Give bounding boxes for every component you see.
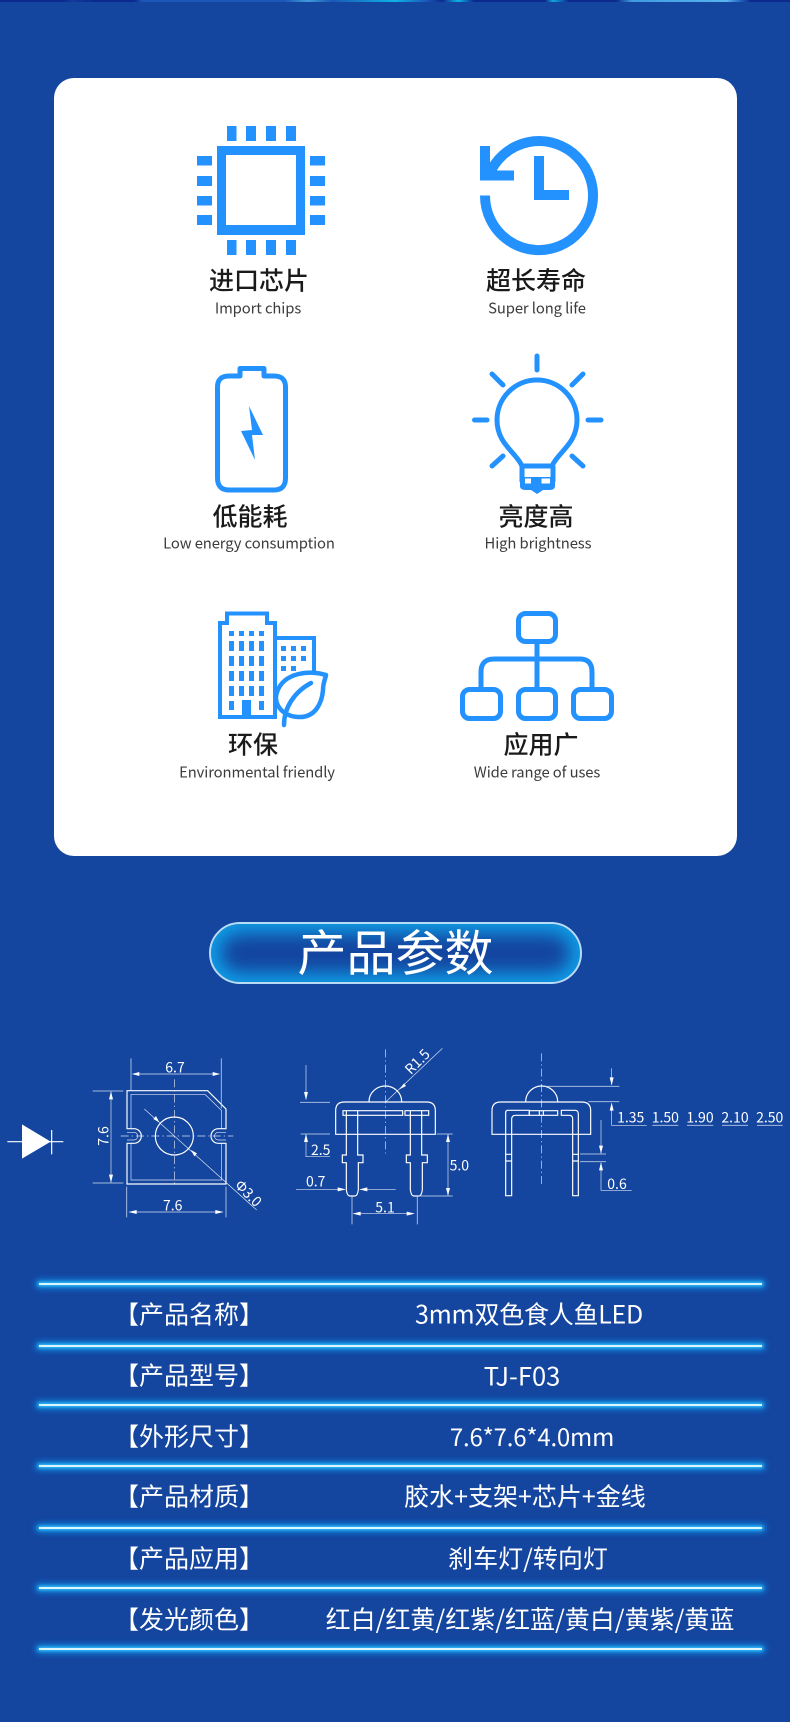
heading pill: product parameters: 产品参数	[297, 914, 494, 986]
diagram: front view: 5.0	[450, 1156, 469, 1176]
row label: size: 【外形尺寸】	[114, 1418, 264, 1454]
row value: name: 3mm双色食人鱼LED	[415, 1296, 643, 1332]
icon: network hierarchy	[460, 611, 614, 721]
icon: battery	[215, 366, 288, 492]
heading pill: product parameters	[209, 922, 582, 984]
diagram: top view: Φ3.0	[230, 1175, 266, 1211]
diagram: front view	[296, 1044, 469, 1224]
icon: diode symbol	[7, 1124, 64, 1159]
diagram: side view: 1.90	[686, 1108, 714, 1128]
text: wide use zh: 应用广	[503, 726, 579, 762]
diagram: top view	[92, 1057, 266, 1218]
row label: material: 【产品材质】	[114, 1478, 264, 1514]
text: import chips en: Import chips	[215, 298, 301, 319]
text: low energy en: Low energy consumption	[163, 533, 335, 554]
text: low energy zh: 低能耗	[212, 498, 288, 534]
row value: material: 胶水+支架+芯片+金线	[404, 1478, 646, 1514]
row label: application: 【产品应用】	[114, 1540, 264, 1576]
panel: features card	[54, 78, 737, 856]
diagram: side view	[491, 1053, 783, 1196]
text: long life en: Super long life	[488, 298, 586, 319]
text: eco zh: 环保	[228, 726, 278, 762]
diagram: side view: 2.10	[721, 1108, 749, 1128]
row label: model: 【产品型号】	[114, 1356, 264, 1392]
diagram: front view: R1.5	[400, 1044, 435, 1079]
diagram: top view: 7.6	[163, 1196, 183, 1216]
text: eco en: Environmental friendly	[179, 762, 335, 783]
text: long life zh: 超长寿命	[486, 262, 586, 298]
diagram: top view: 7.6	[93, 1126, 113, 1146]
diagram: top view: 6.7	[165, 1057, 185, 1077]
text: import chips zh: 进口芯片	[209, 262, 309, 298]
diagram: front view: 2.5	[311, 1140, 331, 1160]
icon: light bulb	[472, 354, 604, 494]
table: product parameters	[32, 1276, 768, 1657]
row label: colour: 【发光颜色】	[114, 1600, 264, 1636]
diagram: side view: 1.35	[617, 1108, 644, 1128]
diagram: side view: 0.6	[607, 1174, 627, 1194]
row value: size: 7.6*7.6*4.0mm	[450, 1418, 614, 1453]
text: wide use en: Wide range of uses	[474, 762, 600, 783]
top strip	[0, 0, 790, 2]
diagram: front view: 5.1	[375, 1197, 395, 1217]
row value: model: TJ-F03	[484, 1356, 560, 1393]
row value: application: 刹车灯/转向灯	[448, 1540, 608, 1576]
icon: chip	[197, 126, 325, 255]
diagram: side view: 1.50	[652, 1108, 679, 1128]
diagram: front view: 0.7	[306, 1172, 326, 1192]
icon: clock with back arrow	[480, 136, 598, 256]
row value: colour: 红白/红黄/红紫/红蓝/黄白/黄紫/黄蓝	[326, 1600, 734, 1636]
row label: name: 【产品名称】	[114, 1296, 264, 1332]
text: high brightness zh: 亮度高	[498, 498, 574, 534]
diagram: side view: 2.50	[756, 1108, 783, 1128]
icon: buildings and leaf	[218, 612, 328, 728]
text: high brightness en: High brightness	[485, 533, 591, 554]
